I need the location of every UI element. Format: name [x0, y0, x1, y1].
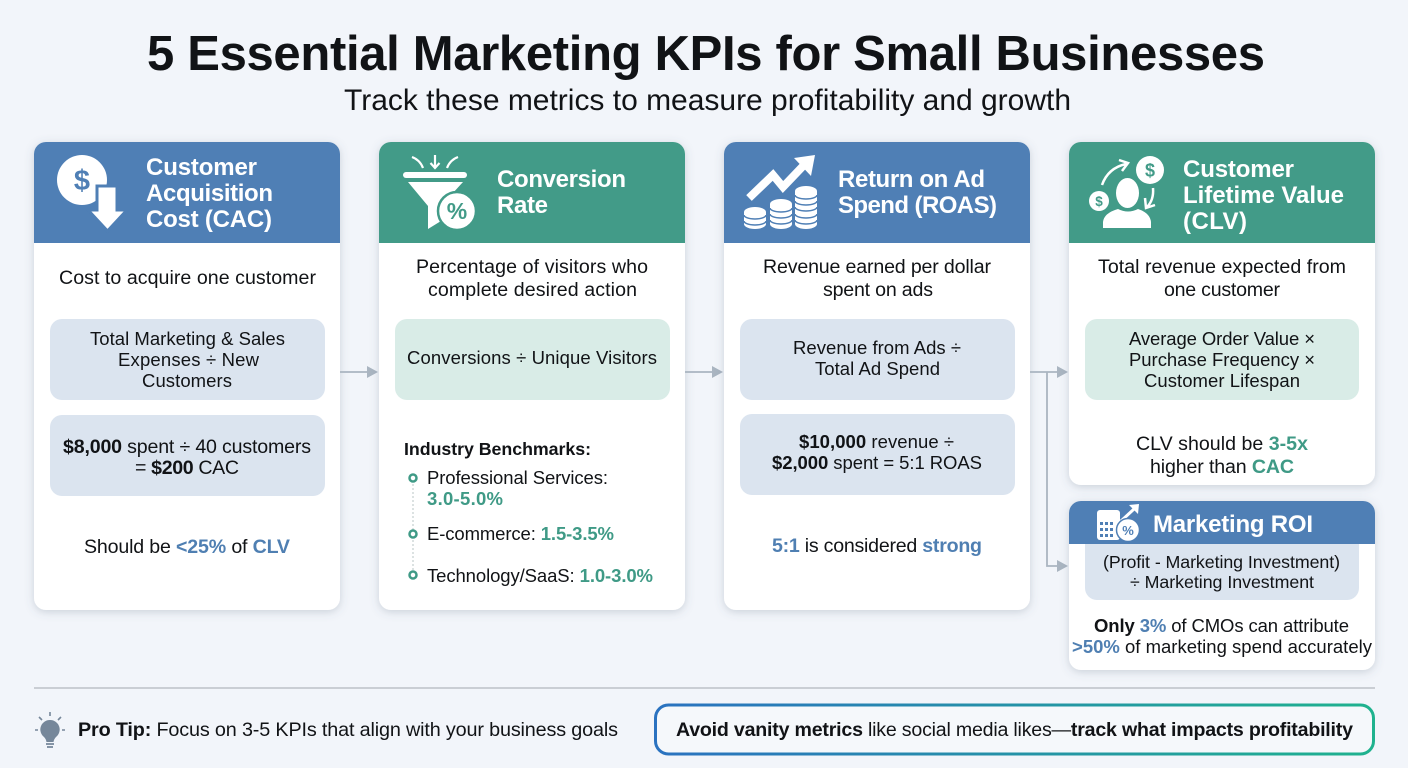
benchmark: technology: Technology/SaaS: 1.0-3.0%	[427, 565, 653, 586]
title: 5 Essential Marketing KPIs for Small Businesses	[147, 27, 1265, 81]
header text	[146, 154, 273, 233]
header text: Conversion	[497, 166, 626, 193]
statistic note: >50% of marketing spend accurately	[1072, 636, 1373, 657]
example box	[740, 414, 1015, 495]
statistic note	[1072, 615, 1373, 657]
example box: $2,000 spent = 5:1 ROAS	[772, 452, 982, 473]
target note: Should be <25% of CLV	[84, 536, 290, 558]
header text	[838, 166, 997, 219]
icon: coins and rising arrow	[744, 155, 817, 229]
header text	[1183, 156, 1344, 235]
example box: $8,000 spent ÷ 40 customers	[63, 436, 311, 458]
header text: Customer	[146, 154, 257, 181]
subtitle: Track these metrics to measure profitability and growth	[344, 84, 1071, 117]
icon: customer with coins	[1089, 156, 1164, 228]
header text	[497, 166, 626, 219]
description: Percentage of visitors who	[416, 256, 648, 278]
tip text: Pro Tip: Focus on 3-5 KPIs that align with your business goals	[78, 719, 618, 741]
benchmark: professional services	[410, 467, 608, 509]
icon: light bulb	[35, 712, 65, 747]
description: Cost to acquire one customer	[59, 267, 316, 289]
header: ROAS	[724, 142, 1030, 243]
icon: dollar with down arrow: $	[74, 165, 90, 197]
formula box: Total Ad Spend	[815, 358, 940, 379]
header: CAC	[34, 142, 340, 243]
target note: 5:1 is considered strong	[772, 535, 982, 557]
header text: Customer	[1183, 156, 1294, 183]
description: Total revenue expected from	[1098, 256, 1346, 278]
panel: Return on Ad Spend	[724, 142, 1030, 610]
icon: customer with coins: $	[1095, 194, 1103, 209]
example box: = $200 CAC	[135, 457, 239, 479]
benchmark: e-commerce: E-commerce: 1.5-3.5%	[427, 523, 614, 544]
header text: Cost (CAC)	[146, 206, 272, 233]
arrow: CAC to conversion	[340, 366, 378, 378]
icon: calculator with percent: %	[1122, 523, 1134, 538]
description	[763, 256, 991, 301]
panel: Customer Acquisition Cost	[34, 142, 340, 610]
icon: calculator with percent	[1097, 504, 1140, 542]
header: conversion	[379, 142, 685, 243]
benchmarks: Industry Benchmarks:	[404, 439, 591, 459]
formula box: ÷ Marketing Investment	[1130, 572, 1314, 592]
description: one customer	[1164, 279, 1280, 301]
pro tip	[35, 712, 618, 747]
description	[1098, 256, 1346, 301]
formula box: Customer Lifespan	[1144, 370, 1300, 391]
formula box: Purchase Frequency ×	[1129, 349, 1315, 370]
formula box	[1085, 544, 1359, 600]
formula box	[50, 319, 325, 400]
formula box: (Profit - Marketing Investment)	[1103, 552, 1340, 572]
statistic note: Only 3% of CMOs can attribute	[1094, 615, 1349, 636]
formula box	[740, 319, 1015, 400]
target note: higher than CAC	[1150, 456, 1294, 478]
callout: avoid vanity metrics: Avoid vanity metrics like social media likes—track what impacts profitability	[676, 719, 1353, 741]
icon: funnel with percent	[403, 155, 476, 230]
arrow: conversion to ROAS	[685, 366, 723, 378]
formula box: Conversions ÷ Unique Visitors	[407, 347, 657, 368]
panel: Conversion Rate	[379, 142, 685, 610]
icon: customer with coins: $	[1145, 160, 1155, 180]
icon: dollar with down arrow	[57, 155, 127, 231]
header text: Acquisition	[146, 180, 273, 207]
description: complete desired action	[428, 279, 637, 301]
header text: (CLV)	[1183, 208, 1247, 235]
header text: Rate	[497, 192, 548, 219]
formula box: Revenue from Ads ÷	[793, 337, 961, 358]
description	[416, 256, 648, 301]
benchmarks	[404, 439, 653, 586]
panel: Customer Lifetime Value	[1069, 142, 1375, 485]
formula box: Customers	[142, 370, 232, 391]
benchmark: professional services: Professional Services:	[427, 467, 608, 488]
header text: Lifetime Value	[1183, 182, 1344, 209]
example box	[50, 415, 325, 496]
header: ROI	[1069, 501, 1375, 544]
formula box: Total Marketing & Sales	[90, 328, 285, 349]
description: Revenue earned per dollar	[763, 256, 991, 278]
benchmark: professional services: 3.0-5.0%	[427, 488, 503, 509]
target note: CLV should be 3-5x	[1136, 433, 1308, 455]
target note	[1136, 433, 1308, 478]
example box: $10,000 revenue ÷	[799, 431, 954, 452]
formula box	[395, 319, 670, 400]
icon: funnel with percent: %	[447, 198, 467, 224]
header text: Spend (ROAS)	[838, 192, 997, 219]
header text: Return on Ad	[838, 166, 985, 193]
header text: Marketing ROI	[1153, 511, 1313, 538]
header: CLV	[1069, 142, 1375, 243]
arrow: ROAS branching to CLV and ROI	[1030, 366, 1068, 572]
description: spent on ads	[823, 279, 933, 301]
formula box	[1085, 319, 1359, 400]
panel: Marketing ROI	[1069, 501, 1375, 670]
callout: avoid vanity metrics	[656, 705, 1374, 754]
formula box: Expenses ÷ New	[118, 349, 260, 370]
formula box: Average Order Value ×	[1129, 328, 1315, 349]
